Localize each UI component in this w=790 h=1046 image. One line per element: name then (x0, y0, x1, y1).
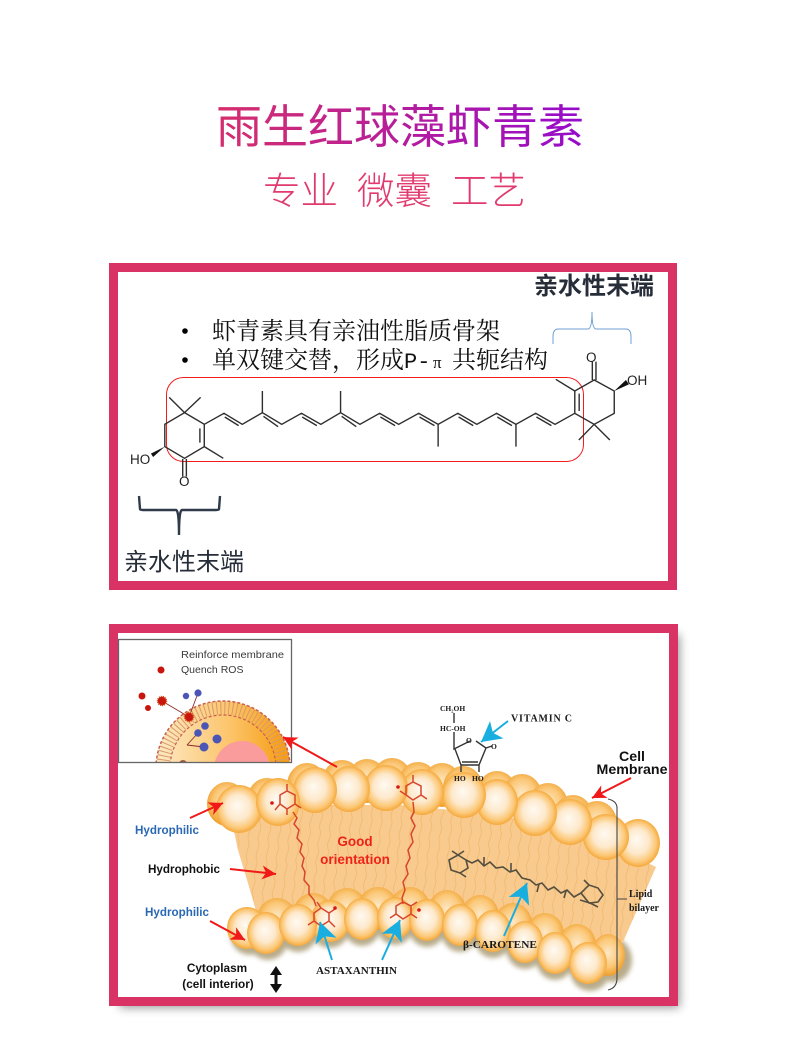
label: lipid bilayer: Lipid (629, 889, 653, 900)
arrow: beta carotene (504, 883, 527, 936)
bullet list: 单双键交替，形成 (212, 348, 404, 374)
panel: molecular structure (114, 268, 672, 586)
label: cytoplasm: Cytoplasm (187, 961, 247, 975)
icon: dark bracket (139, 496, 220, 535)
heading: hydrophilic end top: 亲水性末端 (534, 273, 654, 300)
inset: antioxidant cell detail (118, 638, 292, 764)
chart: astaxanthin skeletal formula: OH (627, 373, 647, 388)
label: vitamin C: VITAMIN C (511, 714, 572, 724)
label: cell membrane: Cell (619, 749, 645, 765)
subtitle: 工艺 (451, 170, 526, 212)
subtitle (263, 170, 526, 212)
molecule: astaxanthin right (390, 775, 427, 919)
label: lipid bilayer: bilayer (629, 903, 660, 914)
vitamin C formula: O (491, 742, 497, 751)
molecule: beta carotene (449, 851, 603, 907)
back row spheres: bottom leaflet (257, 887, 625, 976)
arrow: hydrophilic bottom (210, 921, 245, 940)
vitamin C formula: O (466, 736, 472, 745)
arrow: hydrophobic (230, 869, 276, 874)
arrow: inset to membrane (283, 737, 337, 767)
label: hydrophilic top: Hydrophilic (135, 823, 199, 837)
bullet list: 虾青素具有亲油性脂质骨架 (212, 318, 500, 345)
vitamin C formula: HO (472, 774, 484, 783)
icon: double arrow (270, 966, 282, 993)
inset text: Reinforce membrane (181, 649, 284, 661)
subtitle: 微囊 (357, 170, 432, 212)
label: cell membrane (597, 749, 668, 778)
label: lipid bilayer (629, 889, 660, 914)
sphere shadows (230, 903, 632, 991)
back row spheres: top leaflet (207, 758, 617, 845)
vitamin C formula: HC-OH (440, 724, 466, 733)
inset text (181, 649, 284, 676)
arrows: astaxanthin (320, 920, 400, 960)
title: 雨生红球藻虾青素 (216, 101, 584, 153)
bullet list: π (433, 353, 442, 372)
label: cytoplasm (182, 961, 254, 991)
label: good orientation: orientation (320, 852, 390, 867)
highlight: red rounded frame (166, 378, 584, 462)
arrow: hydrophilic top (190, 803, 223, 818)
vitamin C formula: HO (454, 774, 466, 783)
bullet list (182, 318, 548, 375)
label: good orientation (320, 834, 390, 867)
vitamin C formula (440, 704, 497, 783)
label: beta carotene: β-CAROTENE (463, 940, 537, 951)
front row spheres: bottom leaflet (227, 897, 607, 984)
chart: astaxanthin skeletal formula: HO (130, 452, 150, 467)
lipid tails (232, 805, 656, 950)
bullet list: P- (404, 350, 430, 375)
front row spheres: top leaflet (216, 765, 660, 867)
arrow: cell membrane (592, 778, 631, 798)
label: good orientation: Good (337, 834, 373, 849)
arrow: vitamin C (481, 721, 508, 742)
label: hydrophobic: Hydrophobic (148, 862, 220, 876)
bracket: lipid bilayer (608, 799, 627, 990)
chart: astaxanthin skeletal formula: O (179, 474, 190, 489)
label: astaxanthin: ASTAXANTHIN (316, 966, 397, 977)
subtitle: 专业 (263, 170, 338, 212)
vitamin C formula: CH₂OH (440, 704, 465, 713)
label: cell membrane: Membrane (597, 762, 668, 778)
inset text: Quench ROS (181, 664, 243, 676)
panel: cell membrane diagram (114, 628, 680, 1008)
chart: lipid bilayer (207, 758, 660, 991)
label: cytoplasm: (cell interior) (182, 977, 254, 991)
molecule: astaxanthin left (270, 784, 337, 927)
label: hydrophilic bottom: Hydrophilic (145, 905, 209, 919)
icon: blue bracket (553, 312, 631, 344)
chart: astaxanthin skeletal formula (130, 350, 647, 489)
label: hydrophilic end bottom: 亲水性末端 (124, 549, 244, 576)
bullet list: 共轭结构 (452, 347, 548, 374)
chart: astaxanthin skeletal formula: O (586, 350, 597, 365)
